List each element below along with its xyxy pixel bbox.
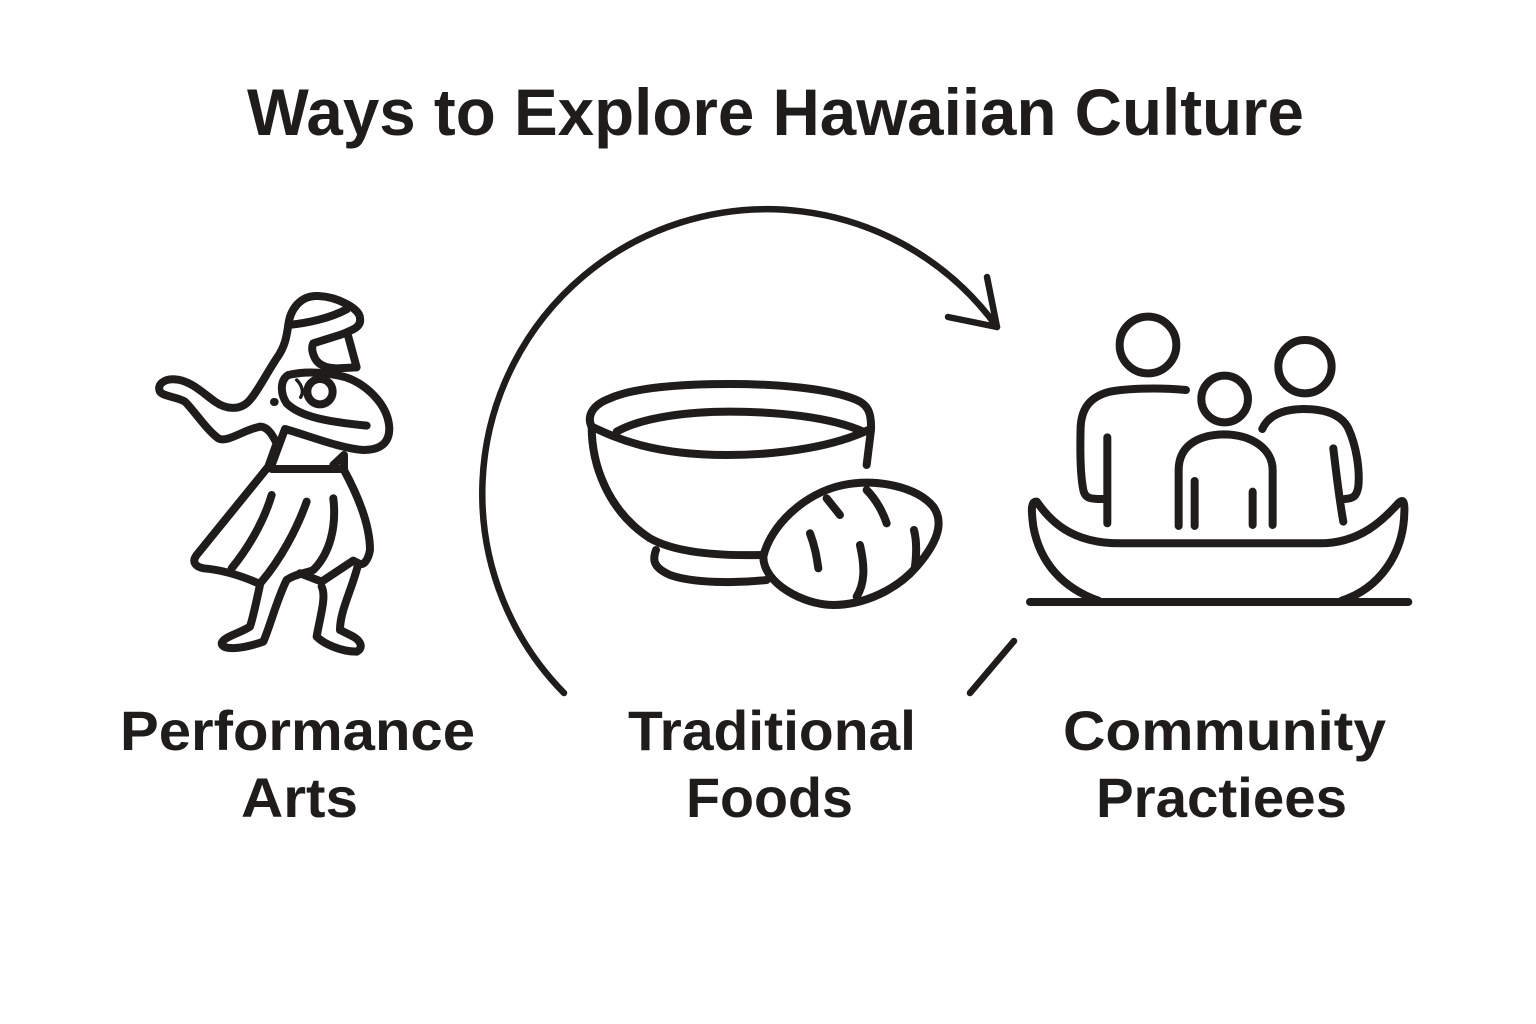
icon: family in canoe bbox=[1030, 317, 1408, 602]
bowl rim bbox=[590, 384, 871, 465]
icon: hula dancer bbox=[159, 296, 389, 652]
label: Traditional Foods: Foods bbox=[686, 766, 853, 829]
adult left bbox=[1080, 317, 1186, 523]
icon: bowl and sweet potato bbox=[590, 384, 939, 605]
arrow: short dash segment bbox=[970, 641, 1014, 693]
canoe bbox=[1032, 501, 1404, 601]
label: Community Practiees: Community bbox=[1063, 699, 1386, 762]
arrow: circular arc with arrowhead bbox=[482, 209, 997, 693]
label: Performance Arts bbox=[120, 699, 475, 829]
title: Ways to Explore Hawaiian Culture bbox=[247, 75, 1304, 149]
adult right bbox=[1262, 340, 1359, 522]
label: Traditional Foods bbox=[628, 699, 916, 829]
label: Performance Arts: Arts bbox=[241, 766, 358, 829]
sweet potato bbox=[763, 483, 939, 605]
label: Community Practiees bbox=[1063, 699, 1386, 829]
label: Community Practiees: Practiees bbox=[1096, 766, 1347, 829]
label: Traditional Foods: Traditional bbox=[628, 699, 916, 762]
label: Performance Arts: Performance bbox=[120, 699, 475, 762]
bowl body bbox=[592, 427, 762, 555]
child bbox=[1179, 376, 1273, 526]
